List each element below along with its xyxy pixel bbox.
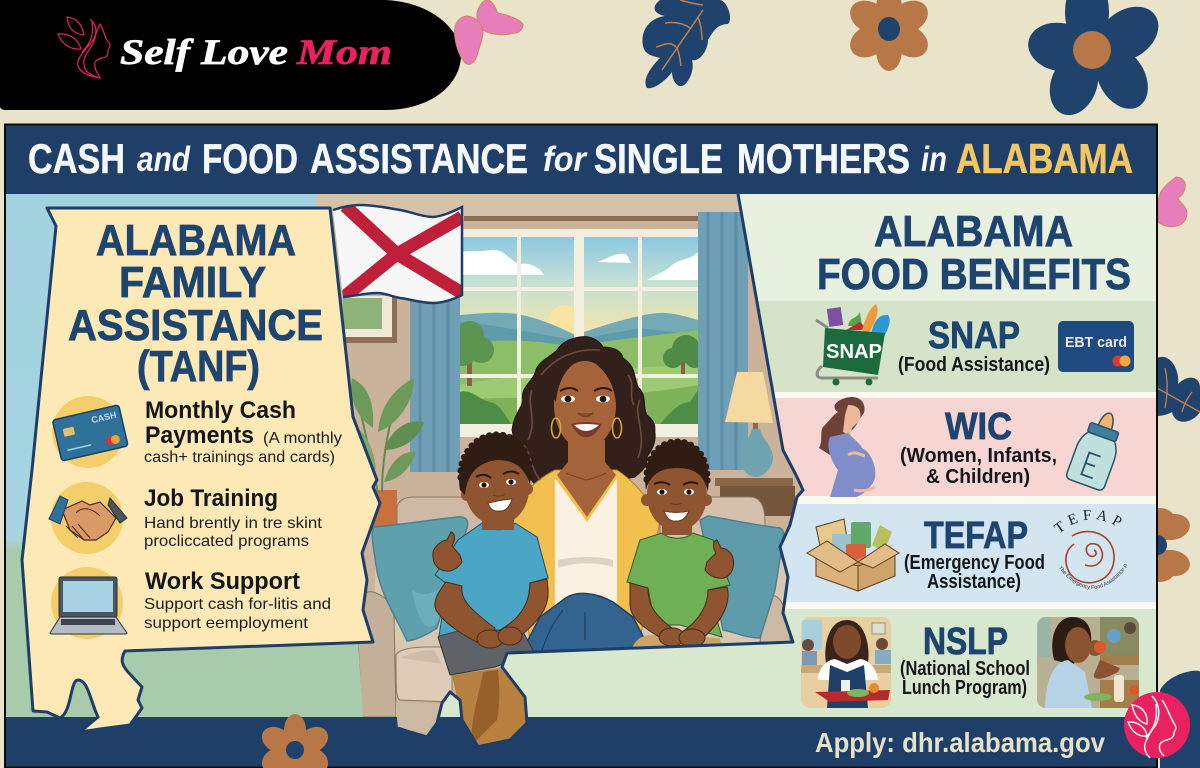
item: work support: Support cash for-litis and	[144, 596, 331, 613]
heading: food benefits: FOOD BENEFITS	[817, 250, 1131, 299]
icon: laptop	[50, 567, 127, 639]
row: NSLP: NSLP	[923, 621, 1008, 663]
TANF heading: FAMILY	[119, 258, 266, 307]
logo wordmark: Mom	[296, 32, 392, 72]
panel: Alabama Family Assistance shape	[22, 208, 380, 732]
boy right	[627, 440, 730, 650]
icon: EBT card	[1058, 321, 1134, 372]
icon: Alabama flag	[330, 200, 466, 308]
seat cushion	[396, 647, 452, 702]
TANF heading: ASSISTANCE	[68, 301, 323, 350]
main title: FOOD	[202, 135, 298, 182]
sofa back left	[396, 496, 482, 533]
brown leg	[452, 668, 526, 745]
face	[554, 361, 616, 449]
arms	[435, 582, 495, 648]
icon: logo badge	[1124, 692, 1190, 758]
item: work support: support eemployment	[144, 615, 309, 632]
pillows	[372, 516, 784, 641]
heading: food benefits	[817, 207, 1131, 299]
row: TEFAP: Assistance)	[927, 571, 1021, 593]
illustration: family in living room	[316, 194, 806, 754]
wall	[332, 218, 802, 736]
TANF heading: (TANF)	[137, 342, 260, 391]
row: NSLP: (National School	[900, 658, 1030, 680]
shirt	[627, 533, 730, 637]
curtains	[410, 212, 748, 472]
panel: food benefits backgrounds	[400, 194, 1156, 717]
decoration: orange flower	[844, 0, 934, 71]
main title	[28, 135, 1133, 182]
item: monthly cash payments: Payments	[145, 422, 254, 449]
wall picture	[343, 296, 397, 343]
plant	[351, 378, 424, 527]
TANF heading	[68, 216, 323, 391]
item: monthly cash payments: Monthly Cash	[145, 397, 296, 424]
neck and chest	[557, 440, 616, 517]
icon: EBT card: EBT card	[1065, 334, 1127, 351]
right arm	[760, 595, 790, 642]
icon: SNAP grocery cart: SNAP	[826, 341, 882, 363]
icon: SNAP grocery cart	[816, 304, 890, 386]
decoration: navy flower	[1024, 0, 1169, 122]
decoration: footer flower	[257, 714, 333, 768]
icon: pregnant woman	[819, 397, 875, 497]
row: WIC: (Women, Infants,	[900, 445, 1057, 467]
jeans	[525, 593, 645, 655]
hands	[477, 630, 503, 648]
decoration: navy oak leaf	[642, 0, 730, 88]
item: work support: Work Support	[145, 568, 300, 595]
row: SNAP	[816, 304, 1134, 386]
main title: ASSISTANCE	[310, 135, 528, 182]
main title: and	[137, 140, 191, 179]
picture: girl with lunch tray	[801, 617, 891, 708]
decoration: pink shape right	[1158, 177, 1187, 227]
decoration: navy leaf right	[1157, 357, 1200, 422]
main title: in	[921, 140, 947, 179]
head	[482, 520, 514, 530]
item: monthly cash payments	[52, 396, 342, 468]
item: monthly cash payments: cash+ trainings and cards)	[144, 449, 335, 466]
sofa	[358, 497, 790, 732]
main title: CASH	[28, 135, 125, 182]
icon: handshake	[49, 482, 127, 554]
main title: SINGLE	[594, 135, 723, 182]
item: job training: Job Training	[144, 485, 278, 512]
decoration: navy flower bottom right	[1160, 671, 1200, 768]
decoration: orange flower right	[1144, 508, 1192, 582]
icon: logo woman and leaves	[58, 17, 110, 78]
window	[449, 229, 705, 437]
logo wordmark: Self Love	[120, 32, 288, 72]
heading: food benefits: ALABAMA	[874, 207, 1073, 256]
icon: cash card: CASH	[90, 410, 117, 425]
sofa back right	[660, 496, 766, 538]
footer apply link: Apply: dhr.alabama.gov	[815, 727, 1105, 758]
item: monthly cash payments: (A monthly	[263, 430, 342, 447]
icon: baby bottle	[1065, 406, 1129, 492]
mother	[512, 337, 660, 655]
icon: cash card	[52, 396, 128, 468]
main title: for	[543, 140, 588, 179]
item: work support	[50, 567, 331, 639]
logo wordmark	[120, 32, 392, 72]
boy left	[435, 433, 548, 752]
row: WIC	[819, 397, 1129, 497]
hair back	[512, 337, 655, 488]
sofa body	[375, 560, 790, 660]
picture: girl eating lunch	[1037, 617, 1139, 708]
outline: right side of Alabama shape	[398, 194, 803, 752]
row: TEFAP: (Emergency Food	[904, 552, 1045, 574]
mother's hands on shoulders	[433, 532, 734, 578]
row: TEFAP	[806, 510, 1126, 593]
hands	[659, 628, 685, 646]
row: TEFAP: TEFAP	[924, 515, 1028, 557]
shorts	[632, 635, 721, 647]
cardigan	[512, 470, 660, 640]
left arm	[358, 592, 396, 717]
white top	[555, 478, 617, 615]
item: job training: Hand brently in tre skint	[144, 515, 323, 532]
row: WIC: WIC	[945, 406, 1012, 448]
TANF heading: ALABAMA	[96, 216, 296, 265]
icon: TEFAP logo: TEFAP	[1053, 510, 1122, 533]
logo banner	[0, 0, 461, 110]
row: SNAP: (Food Assistance)	[898, 354, 1050, 376]
item: job training	[49, 482, 323, 554]
curtain rod	[464, 216, 699, 221]
decoration: butterfly	[454, 0, 523, 64]
shirt	[435, 523, 548, 636]
row: NSLP	[801, 617, 1139, 708]
hair highlights	[524, 350, 641, 480]
main title: MOTHERS	[737, 135, 910, 182]
arms	[630, 583, 672, 642]
shorts	[438, 628, 534, 675]
head	[662, 526, 692, 535]
item: job training: procliccated programs	[144, 533, 309, 550]
row: WIC: & Children)	[926, 466, 1030, 488]
row: SNAP: SNAP	[928, 315, 1020, 357]
icon: food box	[807, 519, 899, 591]
icon: TEFAP logo	[1053, 510, 1126, 590]
lower sofa	[396, 702, 398, 728]
lamp and table	[715, 372, 795, 516]
panel background: left sky and lawn	[6, 194, 366, 717]
main title: ALABAMA	[956, 135, 1133, 182]
icon: TEFAP logo: The Emergency Food Assistance Program	[1059, 564, 1126, 590]
row: NSLP: Lunch Program)	[902, 677, 1027, 699]
